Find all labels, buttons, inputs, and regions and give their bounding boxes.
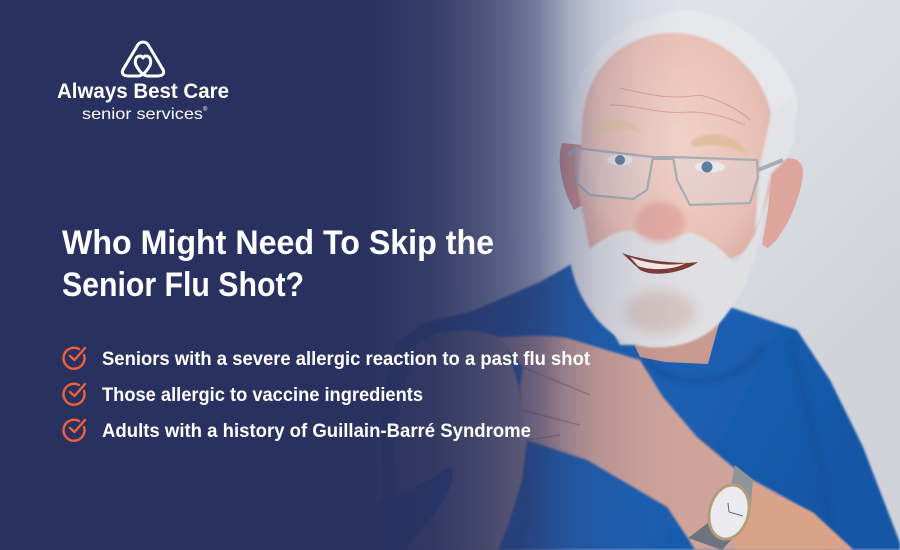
logo wordmark: Always Best Care	[57, 80, 229, 103]
neck	[625, 320, 720, 364]
forehead wrinkles	[610, 88, 750, 125]
glasses	[568, 148, 783, 205]
mouth and teeth	[622, 253, 698, 274]
registered mark: ®	[203, 106, 208, 113]
nose	[635, 202, 685, 242]
title: Senior Flu Shot?	[62, 266, 304, 304]
check icon 2	[64, 384, 85, 405]
title	[62, 224, 494, 304]
photo: senior man	[380, 10, 900, 550]
bullet 3: Adults with a history of Guillain-Barré Syndrome	[102, 421, 531, 442]
hair	[572, 10, 797, 165]
watch	[688, 465, 757, 550]
logo icon: triangle with heart	[122, 42, 164, 76]
logo tagline: senior services	[82, 106, 203, 123]
eyebrows	[590, 120, 642, 138]
bullet 2: Those allergic to vaccine ingredients	[102, 385, 423, 406]
eyes	[607, 154, 725, 172]
check icon 1	[64, 348, 85, 369]
bullet list	[64, 348, 591, 442]
title: Who Might Need To Skip the	[62, 224, 494, 262]
check icon 3	[64, 420, 85, 441]
shirt shadows	[515, 340, 830, 550]
hand and forearm	[497, 336, 853, 550]
forearm freckle tone	[735, 482, 853, 550]
hair sideburn right	[755, 95, 795, 230]
finger creases	[522, 367, 590, 440]
face	[578, 33, 772, 290]
bullet 1: Seniors with a severe allergic reaction to a past flu shot	[102, 349, 591, 370]
logo	[57, 42, 229, 123]
beard warm tint	[624, 290, 696, 334]
bare upper arm	[393, 330, 527, 550]
shirt	[380, 262, 900, 550]
left ear	[560, 143, 582, 210]
right ear	[762, 158, 803, 248]
beard	[567, 205, 766, 348]
nurse glove	[380, 466, 453, 550]
